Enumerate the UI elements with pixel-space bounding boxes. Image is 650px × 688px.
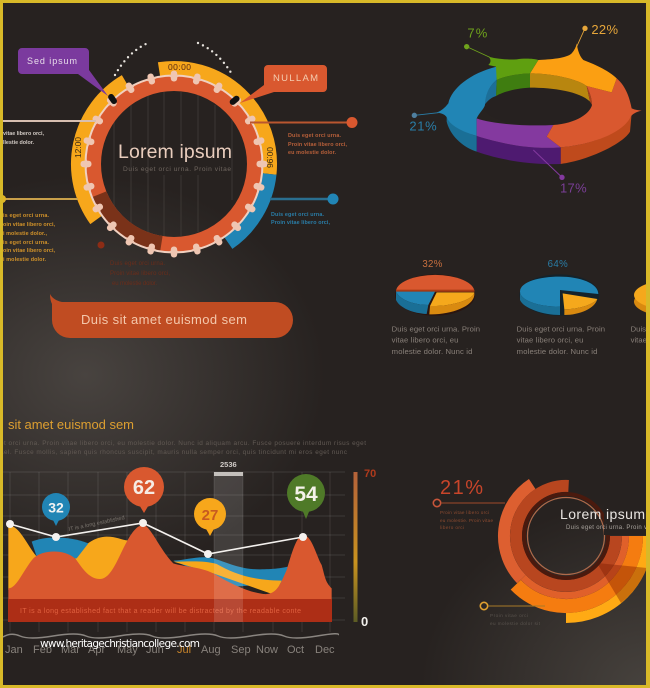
caption pie 32%	[392, 325, 480, 356]
areas	[8, 525, 332, 599]
text band: IT is a long established fact that a reader will be distracted by the readable conte	[20, 608, 301, 615]
month labels: Jun	[146, 644, 164, 656]
pie cropped right	[634, 280, 650, 317]
section paragraph	[0, 440, 366, 456]
center title: Lorem ipsum	[118, 141, 232, 163]
dotted arc right	[198, 43, 233, 76]
radial title block	[560, 498, 650, 535]
donut segment blue 21%	[437, 67, 497, 136]
pie 32%: 32%	[422, 259, 443, 270]
time label 00:00: 00:00	[168, 62, 191, 72]
right orange connector and text	[250, 117, 358, 156]
center subtitle: Duis eget orci urna. Proin vitae	[123, 166, 231, 173]
pin 32	[42, 493, 70, 526]
3D donut chart	[409, 22, 642, 196]
radial left band	[504, 484, 532, 579]
left yellow connector and text: is eget orci urna.	[3, 213, 50, 219]
left yellow connector and text: i molestie dolor.,	[3, 231, 48, 237]
pin 62	[124, 467, 164, 513]
right orange connector and text: eu molestie dolor.	[288, 150, 336, 156]
radial inner band	[516, 486, 616, 586]
label 22%: 22%	[591, 22, 618, 37]
pin 27: 27	[202, 507, 218, 524]
radial orange	[516, 536, 636, 606]
label 17%: 17%	[560, 181, 587, 196]
pie 32%	[395, 259, 475, 316]
label 7%	[464, 26, 490, 57]
highlight column Sep: 2536	[220, 460, 237, 469]
radial callout 21%: Proin vitae libero orci	[440, 510, 489, 515]
pie 64%: 64%	[548, 259, 568, 270]
radial title block: Lorem ipsum	[560, 506, 645, 522]
month labels	[5, 644, 335, 656]
radial callout 21%	[433, 477, 505, 530]
pie 64%	[519, 259, 599, 316]
radial callout yellow: Proin vitae orci	[490, 613, 528, 618]
clock ring chart	[73, 43, 275, 258]
callout: NULLAM	[228, 65, 327, 106]
donut segment orange	[547, 78, 642, 147]
radial outer yellow	[566, 536, 648, 618]
inner vertical lines	[114, 92, 232, 236]
donut segment yellow 22%	[530, 43, 617, 92]
outer yellow arc top	[159, 68, 270, 174]
bottom brown note	[98, 242, 170, 287]
right orange connector and text: Duis eget orci urna.	[288, 133, 342, 139]
month labels: Feb	[33, 644, 52, 656]
radial callout 21%: libero orci	[440, 525, 464, 530]
left white connector and text	[3, 121, 96, 146]
left white connector and text: vitae libero orci,	[3, 131, 44, 137]
radial chart	[504, 484, 648, 618]
left yellow connector and text: i molestie dolor.	[3, 257, 46, 263]
time label 00:96: 00:96	[265, 147, 275, 168]
callout: Sed ipsum	[18, 48, 118, 105]
radial callout 21%: 21%	[440, 477, 483, 499]
inner orange ring	[94, 84, 254, 244]
caption pie 32%: Duis eget orci urna. Proin	[392, 325, 480, 334]
caption pie 32%: molestie dolor. Nunc id	[392, 347, 472, 356]
radial dark wedge	[597, 563, 647, 603]
caption pie 64%: molestie dolor. Nunc id	[517, 347, 597, 356]
radial center rings	[524, 494, 608, 578]
radial callout yellow	[480, 602, 545, 626]
callout: NULLAM: NULLAM	[273, 73, 318, 84]
caption pie 64%: Duis eget orci urna. Proin	[517, 325, 605, 334]
pin 54	[287, 474, 325, 519]
month labels: Apr	[88, 644, 105, 656]
pin 32: 32	[48, 500, 64, 516]
left white connector and text: llestie dolor.	[3, 140, 34, 146]
right orange connector and text: Proin vitae libero orci,	[288, 142, 348, 148]
label 21%	[409, 113, 438, 134]
label 22%	[577, 22, 618, 47]
section heading: sit amet euismod sem	[8, 417, 134, 432]
radial mid band	[523, 536, 626, 595]
radial callout 21%: eu molestie. Proin vitae	[440, 518, 493, 523]
month labels: Oct	[287, 644, 304, 656]
month labels: Now	[256, 644, 278, 656]
text band	[8, 599, 332, 622]
caption cropped pie: Duis	[631, 325, 646, 334]
label 21%: 21%	[409, 119, 437, 134]
wave axis	[3, 634, 338, 638]
colour scale bar	[354, 468, 376, 629]
left yellow connector and text: oin vitae libero orci,	[3, 222, 56, 228]
banner: Duis sit amet euismod sem	[50, 294, 293, 338]
area chart	[3, 460, 376, 656]
outer blue arc	[228, 174, 270, 243]
radial callout yellow: eu molestie dolor sit	[490, 621, 541, 626]
pin 62: 62	[133, 477, 155, 499]
month labels: Sep	[231, 644, 251, 656]
caption pie 64%	[517, 325, 605, 356]
left yellow connector and text: is eget orci urna.	[3, 240, 50, 246]
highlight column Sep	[214, 460, 243, 622]
left yellow connector and text	[0, 195, 78, 263]
white line series	[6, 519, 307, 558]
right blue connector and text: Duis eget orci urna.	[271, 212, 324, 218]
grid	[3, 472, 345, 632]
bottom brown note: eu molestie dolor.	[112, 281, 157, 287]
label 7%: 7%	[467, 26, 488, 41]
bottom brown note: Proin vitae libero orci,	[110, 271, 170, 277]
pin 27	[194, 498, 226, 536]
right blue connector and text	[270, 194, 338, 226]
caption cropped pie	[631, 325, 647, 345]
colour scale bar: 0	[361, 614, 368, 629]
month labels: Jul	[177, 644, 191, 656]
left yellow connector and text: oin vitae libero orci,	[3, 248, 56, 254]
caption pie 64%: vitae libero orci, eu	[517, 336, 583, 345]
bottom brown note: Duis eget orci urna.	[110, 261, 165, 267]
pin 54: 54	[294, 483, 318, 506]
radial title block: Duis eget orci urna. Proin v	[566, 525, 647, 531]
inner brown segment	[99, 194, 161, 244]
section paragraph: et orci urna. Proin vitae libero orci, eu molestie dolor. Nunc id aliquam arcu. Fusce posuere interdum risus eget	[0, 440, 366, 447]
month labels: Dec	[315, 644, 335, 656]
label 17%	[533, 150, 587, 196]
outer yellow arc left	[78, 81, 125, 220]
pale ring	[86, 76, 262, 252]
banner: Duis sit amet euismod sem: Duis sit amet euismod sem	[81, 312, 247, 327]
section paragraph: ael. Fusce mollis, sapien quis rhoncus suscipit, mauris nulla semper orci, quis tincidunt mi eros eget nunc	[0, 449, 348, 456]
caption cropped pie: vitae	[631, 336, 647, 345]
right blue connector and text: Proin vitae libero orci,	[271, 220, 330, 226]
dotted arc left	[115, 43, 148, 75]
donut side walls	[447, 73, 632, 164]
month labels: Aug	[201, 644, 221, 656]
colour scale bar: 70	[364, 468, 376, 480]
small pie charts	[392, 259, 650, 356]
month labels: Mar	[61, 644, 80, 656]
caption pie 32%: vitae libero orci, eu	[392, 336, 458, 345]
donut segment purple 17%	[477, 118, 561, 148]
callout: Sed ipsum: Sed ipsum	[27, 56, 77, 66]
month labels: Jan	[5, 644, 23, 656]
ring knobs	[80, 70, 268, 258]
time label 12:00: 12:00	[73, 137, 83, 158]
watermark: www.heritagechristiancollege.com	[40, 638, 200, 650]
line caption: IT is a long established	[68, 515, 125, 533]
donut segment green 7%	[488, 57, 538, 80]
month labels: May	[117, 644, 138, 656]
